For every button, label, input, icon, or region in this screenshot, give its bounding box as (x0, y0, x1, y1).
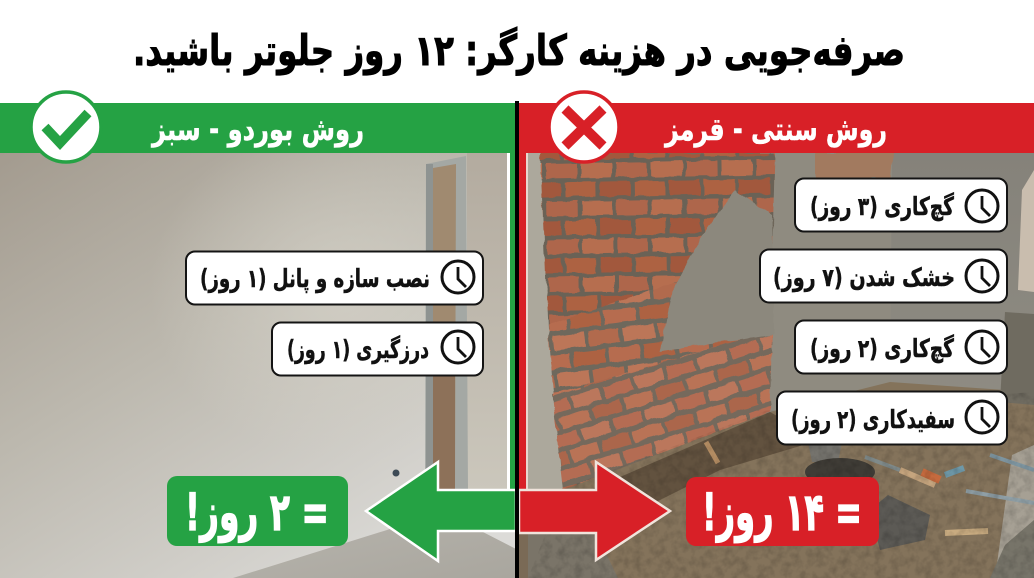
step pill: drying 7 days (760, 250, 1007, 302)
step pill: plastering 3 days (795, 178, 1007, 232)
photo: raw brick wall and rubble (519, 153, 1034, 578)
step pill: whitewash 2 days: سفیدکاری (۲ روز) (791, 405, 955, 435)
arrow: green pointing left (366, 462, 516, 561)
step pill: plastering 3 days: گچ‌کاری (۳ روز) (810, 192, 954, 222)
step pill: joint filling (272, 322, 483, 376)
panel: green drywall method (0, 92, 530, 578)
arrow: red pointing right (519, 462, 670, 560)
header label: red: روش سنتی - قرمز (663, 112, 887, 148)
panel: red traditional method (519, 92, 1034, 578)
step pill: install frame and panel: نصب سازه و پانل (۱ روز) (200, 264, 430, 294)
step pill: install frame and panel (186, 252, 483, 304)
step pill: joint filling: درزگیری (۱ روز) (287, 335, 429, 365)
icon: check mark badge (31, 92, 101, 162)
result box: 2 days: = ۲ روز! (185, 483, 329, 543)
header label: green: روش بوردو - سبز (150, 112, 364, 148)
step pill: whitewash 2 days (777, 392, 1007, 444)
step pill: drying 7 days: خشک شدن (۷ روز) (773, 263, 955, 293)
green header bar (0, 103, 516, 153)
step pill: plastering 2 days: گچ‌کاری (۲ روز) (810, 334, 954, 364)
photo: finished drywall room (0, 120, 530, 578)
result box: 14 days: = ۱۴ روز! (702, 483, 862, 543)
icon: cross badge (549, 92, 619, 162)
red header bar (519, 103, 1034, 153)
step pill: plastering 2 days (795, 320, 1007, 374)
center divider (515, 101, 519, 578)
green side frame (507, 153, 510, 490)
red side frame (519, 153, 526, 490)
title: صرفه‌جویی در هزینه کارگر: ۱۲ روز جلوتر باشید. (133, 26, 905, 76)
